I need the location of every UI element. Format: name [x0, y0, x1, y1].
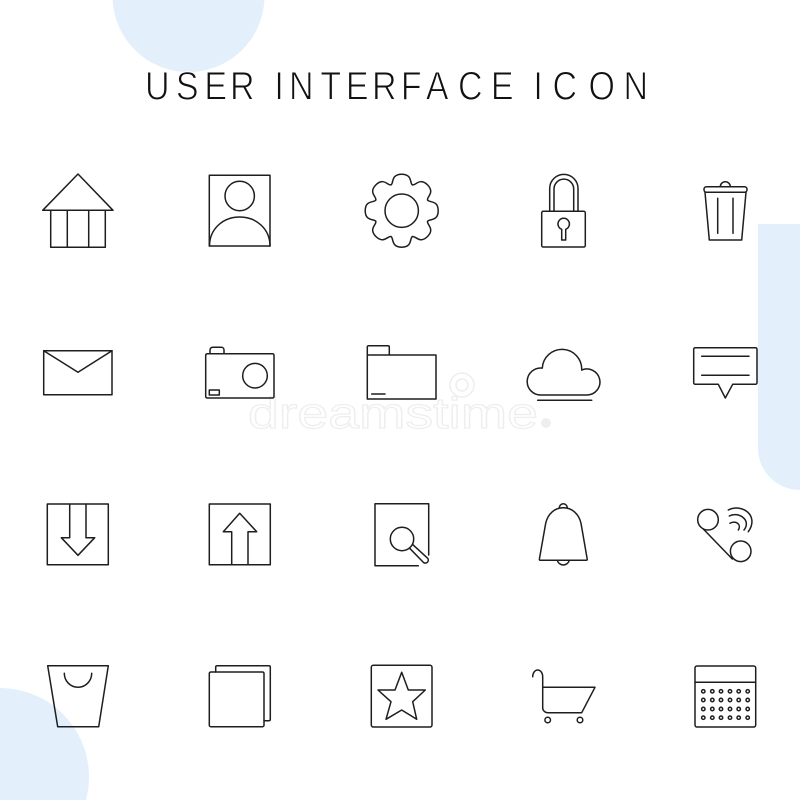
decorative circle: bottom left [0, 688, 89, 800]
icon: copies [209, 666, 270, 727]
icon: shopping cart [533, 670, 595, 723]
icon: trash bin [704, 182, 747, 240]
decorative circle: top [113, 0, 264, 72]
decorative panel: right [758, 224, 800, 490]
watermark: dreamstime [248, 389, 538, 438]
icon: shopping bag [48, 666, 108, 727]
icon: upload arrow [209, 504, 270, 565]
icon: camera [206, 347, 274, 398]
icon: cloud [527, 349, 600, 400]
icon: folder [367, 346, 436, 399]
icon: envelope [44, 351, 112, 395]
icon: document search [375, 504, 429, 566]
icon: chat bubble [694, 348, 757, 398]
icon: download arrow [47, 504, 108, 565]
icon: home [43, 174, 113, 247]
icon: star [371, 665, 432, 727]
icon: bell [539, 504, 587, 565]
title: USER INTERFACE ICON [145, 63, 648, 108]
icon: phone with signal [698, 508, 752, 562]
icon: padlock [542, 174, 585, 247]
icon: settings gear [365, 174, 438, 247]
icon: user profile [209, 175, 270, 246]
icon: calendar [695, 666, 756, 727]
watermark [248, 373, 551, 438]
